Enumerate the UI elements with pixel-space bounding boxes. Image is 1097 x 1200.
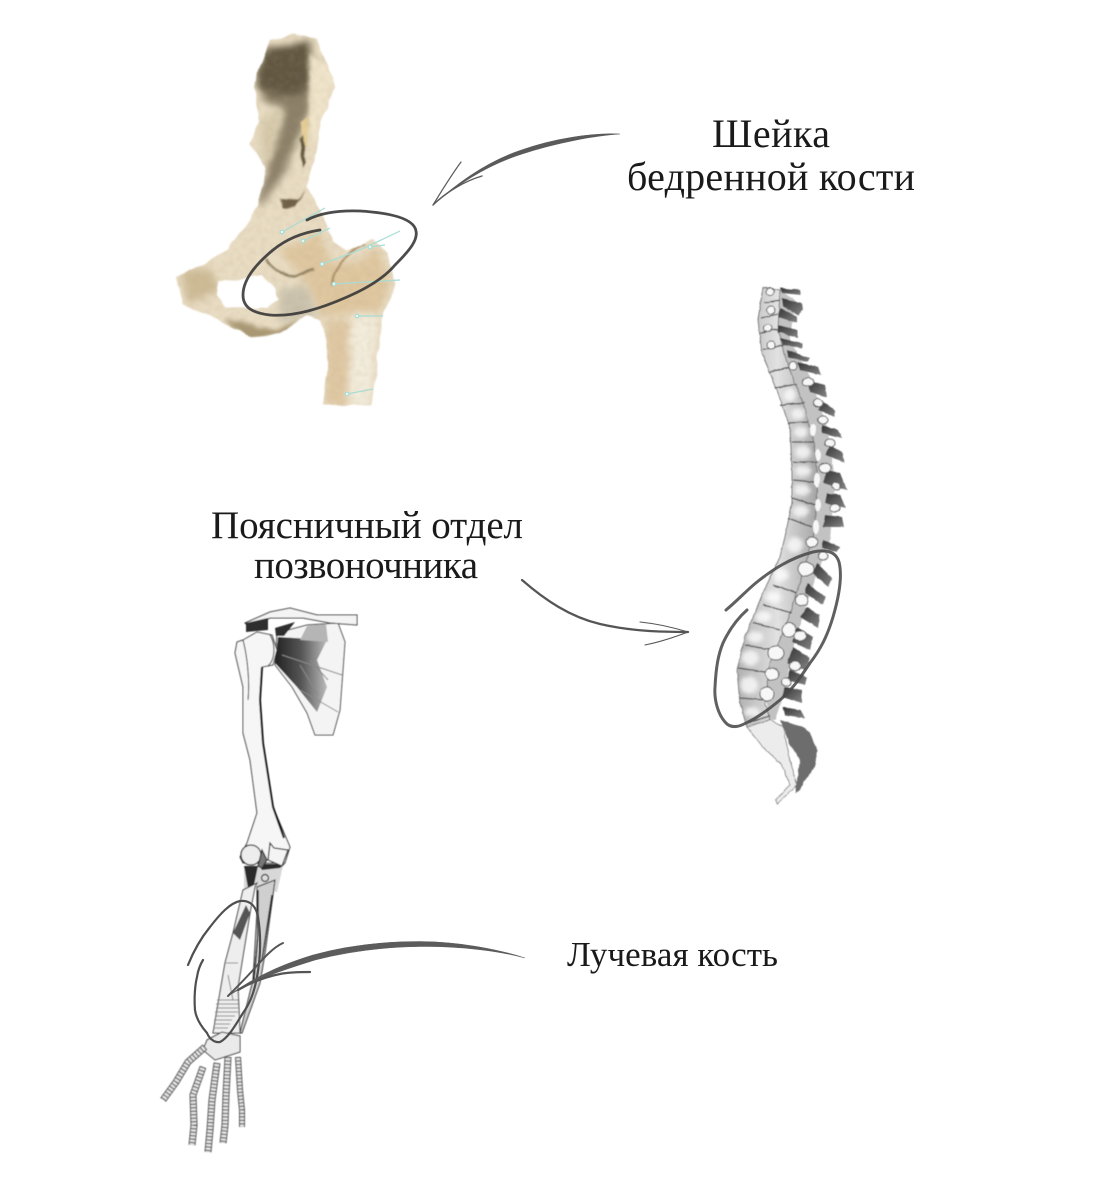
label: femoral neck bbox=[627, 111, 915, 199]
humerus shadow edge bbox=[260, 667, 284, 838]
clavicle bbox=[245, 608, 357, 628]
vertebral column bodies bbox=[737, 287, 818, 727]
ulna bbox=[240, 880, 275, 1033]
scapula ridge lines bbox=[282, 655, 342, 712]
scapula upper shading bbox=[300, 624, 328, 642]
sacrum posterior bbox=[780, 720, 817, 793]
label: radius: Лучевая кость bbox=[567, 935, 778, 974]
posterior shaded band bbox=[766, 290, 835, 720]
intervertebral discs bbox=[738, 300, 818, 722]
humerus bbox=[235, 632, 290, 863]
circle: lumbar spine highlight bbox=[715, 551, 840, 727]
acromion bbox=[246, 618, 295, 636]
sacrum and coccyx bbox=[747, 720, 797, 804]
circle: femoral neck highlight bbox=[243, 211, 416, 315]
elbow shading bbox=[244, 864, 285, 888]
illustration: arm skeleton bbox=[163, 608, 357, 1152]
radius bbox=[213, 883, 257, 1033]
ulna dark line bbox=[254, 890, 272, 980]
vertebral body highlights bbox=[740, 388, 811, 717]
scapula shading bbox=[275, 637, 327, 712]
infographic canvas bbox=[160, 33, 914, 1153]
label: femoral neck: бедренной кости bbox=[627, 154, 915, 199]
vertebral arches bbox=[760, 288, 840, 701]
arrow: lumbar spine bbox=[522, 580, 688, 645]
proximal forearm bbox=[244, 866, 283, 892]
label: lumbar spine bbox=[211, 504, 523, 587]
label: femoral neck: Шейка bbox=[712, 111, 830, 156]
illustration: spine bbox=[737, 287, 847, 804]
label: lumbar spine: Поясничный отдел bbox=[211, 504, 523, 547]
illustration: hip joint and femur bone bbox=[170, 30, 400, 410]
radius shading bbox=[233, 905, 250, 940]
wrist bones bbox=[203, 1032, 240, 1060]
fingers bbox=[163, 1047, 242, 1152]
humeral head line bbox=[243, 635, 274, 700]
scapula bbox=[275, 623, 345, 735]
circle: radius highlight bbox=[188, 901, 260, 1042]
arrow: femoral neck bbox=[433, 134, 620, 205]
label: lumbar spine: позвоночника bbox=[254, 544, 478, 587]
elbow joint bbox=[241, 843, 288, 893]
radius hatching bbox=[213, 963, 238, 1028]
landmark lines bbox=[280, 208, 400, 396]
spinous processes bbox=[778, 288, 847, 718]
arrow: radius bbox=[228, 942, 525, 996]
